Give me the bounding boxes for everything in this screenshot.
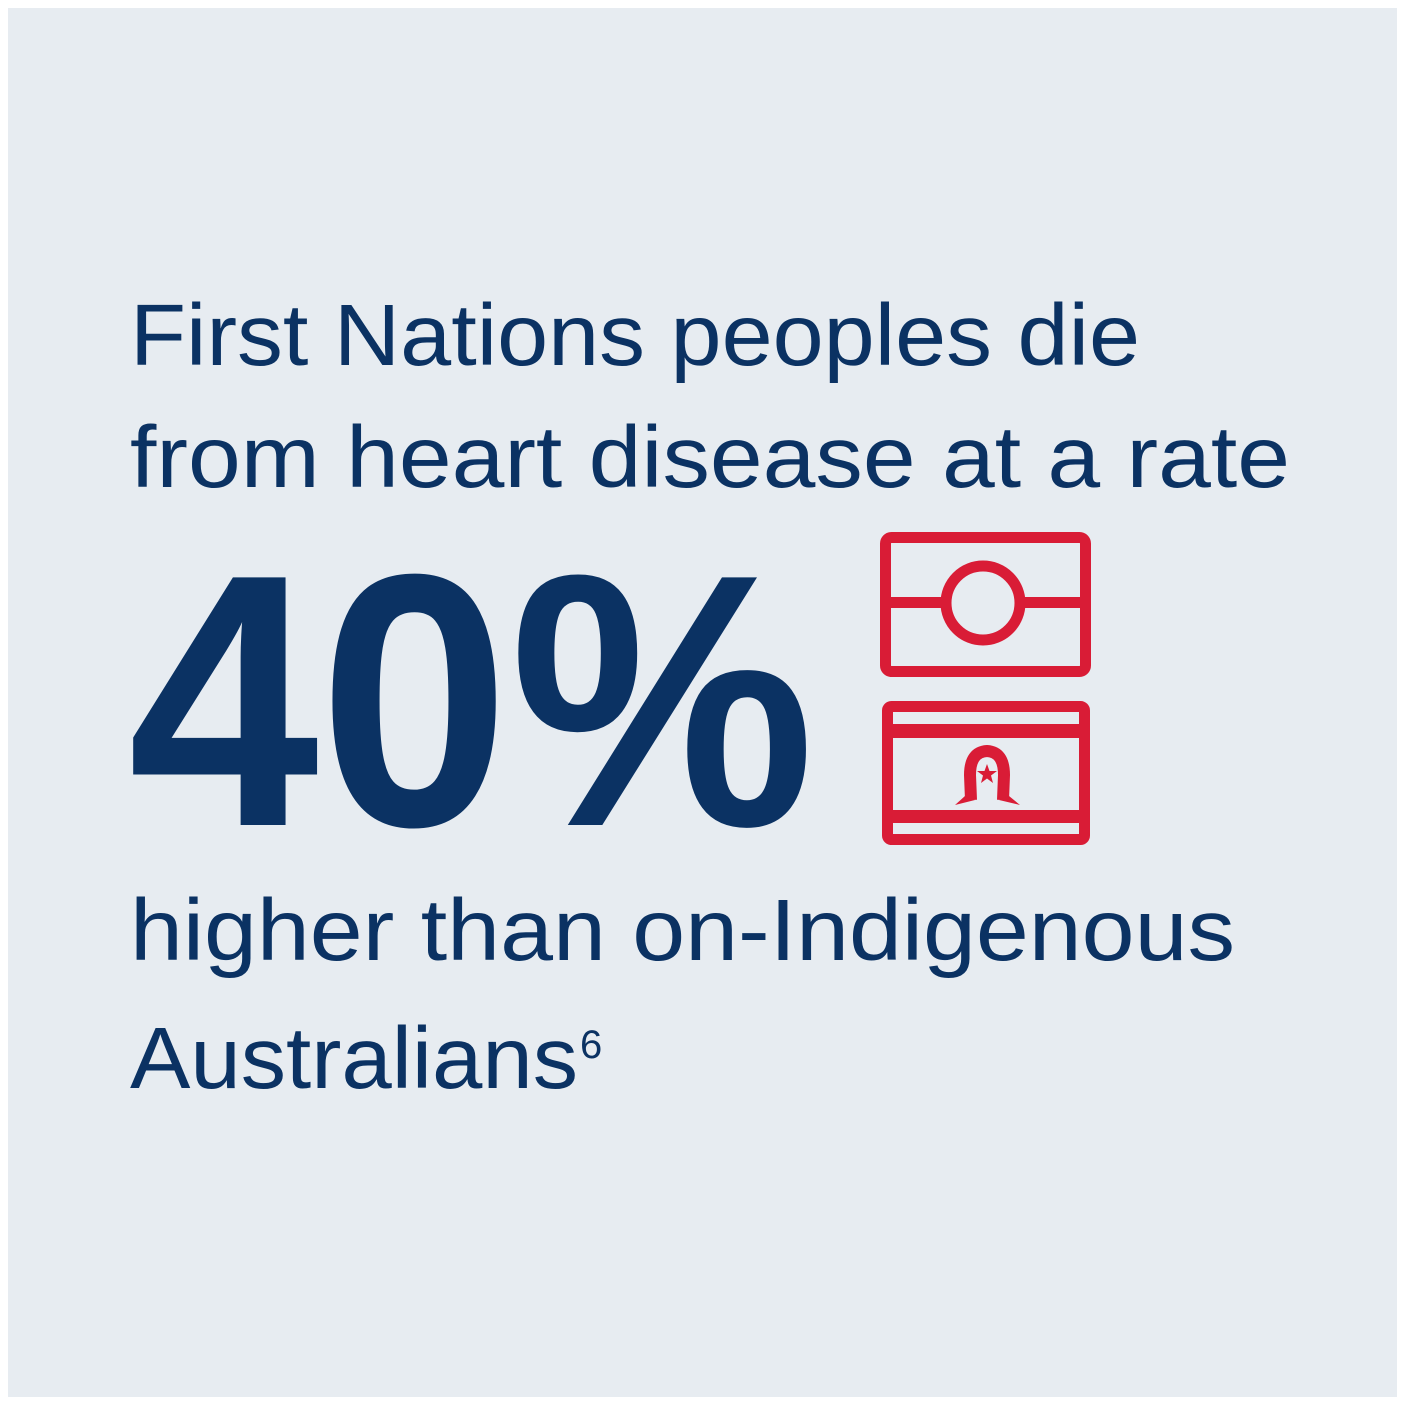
big stat: 40%: 40% (128, 500, 815, 902)
headline text: from heart disease at a rate (130, 409, 1290, 506)
headline text (130, 287, 1290, 506)
headline text: First Nations peoples die (130, 287, 1140, 384)
icon: Aboriginal flag outline (886, 538, 1086, 672)
body text: 6 (580, 1023, 602, 1067)
icon: Torres Strait Islander flag outline (887, 706, 1085, 840)
body text (130, 882, 1235, 1107)
body text: Australians (130, 1010, 578, 1107)
body text: higher than on-Indigenous (130, 882, 1235, 979)
